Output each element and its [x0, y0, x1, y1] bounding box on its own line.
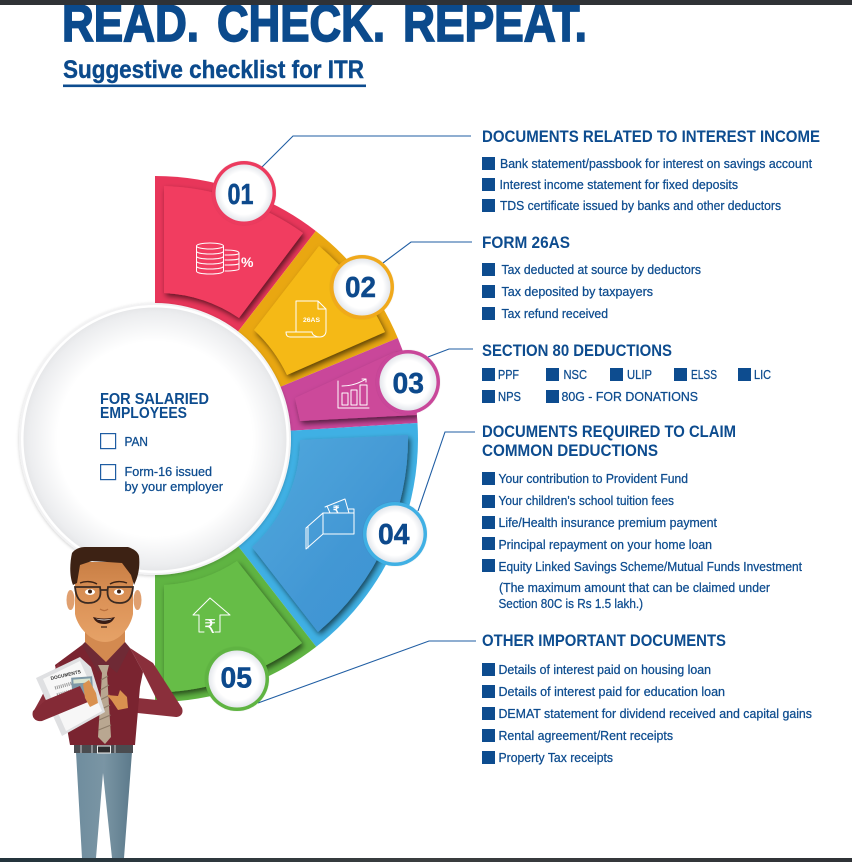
right arm — [128, 648, 183, 717]
section 2: form 26AS: Tax refund received — [502, 307, 608, 321]
left upper arm — [33, 663, 70, 720]
collar — [82, 642, 130, 673]
icon: form 26AS document — [286, 301, 326, 337]
checkbox: form-16 — [101, 465, 223, 494]
section 5: other important documents: Details of interest paid for education loan — [498, 685, 725, 699]
section 4: common deductions: Life/Health insurance premium payment — [498, 516, 718, 530]
forearm and hands — [33, 680, 128, 721]
mouth — [93, 617, 115, 627]
checkbox: form-16: by your employer — [124, 480, 223, 494]
connector lines — [258, 136, 476, 703]
central circle: for salaried employees — [19, 303, 291, 575]
section 5: other important documents — [482, 632, 812, 765]
eyebrows — [80, 582, 127, 584]
section 5: other important documents: OTHER IMPORTANT DOCUMENTS — [482, 632, 726, 650]
sector 05 green — [155, 546, 316, 702]
sector 04 blue — [238, 423, 418, 647]
subtitle: Suggestive checklist for ITR — [63, 56, 364, 84]
badge 01: 01 — [228, 179, 254, 211]
section 4: common deductions: Section 80C is Rs 1.5 lakh.) — [498, 597, 643, 611]
section 1: interest income: Interest income statement for fixed deposits — [500, 178, 738, 192]
icon: wallet with rupee note: ₹ — [333, 505, 340, 516]
section 4: common deductions: (The maximum amount that can be claimed under — [499, 581, 770, 595]
section 1: interest income: Bank statement/passbook for interest on savings account — [500, 157, 813, 171]
icon: house with rupee — [193, 598, 230, 638]
badge 05: 05 — [220, 662, 252, 694]
section 4: common deductions: Your children's school tuition fees — [498, 494, 674, 508]
section 3: section 80 deductions: PPF — [498, 368, 519, 382]
badge 02 — [330, 255, 394, 319]
section 4: common deductions: DOCUMENTS REQUIRED TO CLAIM — [482, 423, 736, 441]
sector 03 magenta — [280, 338, 418, 431]
glasses — [75, 587, 133, 603]
section 2: form 26AS — [482, 234, 701, 321]
heading: for salaried employees: FOR SALARIED — [100, 391, 209, 408]
badge 05 — [205, 647, 269, 711]
section 5: other important documents: Rental agreement/Rent receipts — [498, 729, 673, 743]
ears — [66, 590, 74, 610]
badge 03 — [376, 350, 440, 414]
eyes — [85, 589, 124, 595]
section 4: common deductions: Principal repayment on your home loan — [498, 538, 712, 552]
sector 02 yellow — [238, 231, 398, 387]
section 2: form 26AS: Tax deposited by taxpayers — [502, 285, 653, 299]
badge 01 — [212, 161, 276, 225]
character: man with documents — [33, 547, 183, 858]
heading: for salaried employees — [100, 391, 209, 422]
section 3: section 80 deductions: NSC — [564, 368, 587, 382]
section 3: section 80 deductions — [482, 342, 771, 404]
section 5: other important documents: Property Tax receipts — [498, 751, 613, 765]
icon: growth bar chart — [338, 379, 369, 408]
bottom bar — [0, 858, 852, 862]
section 2: form 26AS: FORM 26AS — [482, 234, 570, 252]
face — [75, 562, 133, 642]
badge 04 — [363, 502, 427, 566]
checkbox: PAN: PAN — [124, 435, 148, 449]
badge 04: 04 — [378, 519, 410, 551]
section 3: section 80 deductions: 80G - FOR DONATIONS — [562, 390, 698, 404]
icon: wallet with rupee note — [306, 499, 354, 549]
belt — [74, 745, 133, 753]
section 1: interest income: DOCUMENTS RELATED TO INTEREST INCOME — [482, 128, 820, 146]
section 3: section 80 deductions: ELSS — [691, 368, 717, 382]
section 4: common deductions — [482, 423, 803, 611]
section 4: common deductions: Your contribution to Provident Fund — [498, 472, 688, 486]
icon: house with rupee: ₹ — [204, 617, 216, 638]
checkbox: PAN — [101, 434, 148, 449]
badge 02: 02 — [345, 272, 376, 304]
section 1: interest income: TDS certificate issued by banks and other deductors — [500, 199, 781, 213]
heading: for salaried employees: EMPLOYEES — [100, 405, 187, 422]
section 5: other important documents: DEMAT statement for dividend received and capital gains — [498, 707, 812, 721]
nose — [100, 609, 108, 610]
section 4: common deductions: COMMON DEDUCTIONS — [482, 442, 658, 460]
icon: form 26AS document: 26AS — [303, 317, 321, 324]
section 3: section 80 deductions: SECTION 80 DEDUCTIONS — [482, 342, 672, 360]
top bar — [0, 0, 852, 5]
section 2: form 26AS: Tax deducted at source by deductors — [502, 263, 701, 277]
icon: coins and percent: % — [241, 254, 254, 270]
badge 03: 03 — [392, 368, 424, 400]
section 3: section 80 deductions: LIC — [754, 368, 771, 382]
section 3: section 80 deductions: NPS — [498, 390, 521, 404]
torso shirt — [55, 645, 143, 745]
papers — [36, 657, 105, 736]
checkbox: form-16: Form-16 issued — [124, 465, 212, 479]
section 1: interest income — [482, 128, 820, 213]
tie — [98, 665, 111, 744]
sector 01 red — [155, 176, 316, 332]
radial wheel of five sectors — [150, 170, 430, 710]
papers: DOCUMENTS — [50, 669, 82, 682]
title — [62, 0, 587, 53]
section 3: section 80 deductions: ULIP — [627, 368, 652, 382]
neck — [85, 625, 125, 667]
section 5: other important documents: Details of interest paid on housing loan — [498, 663, 711, 677]
section 4: common deductions: Equity Linked Savings Scheme/Mutual Funds Investment — [498, 560, 803, 574]
icon: coins and percent — [196, 243, 254, 274]
trousers — [76, 752, 132, 858]
hair — [70, 547, 139, 585]
